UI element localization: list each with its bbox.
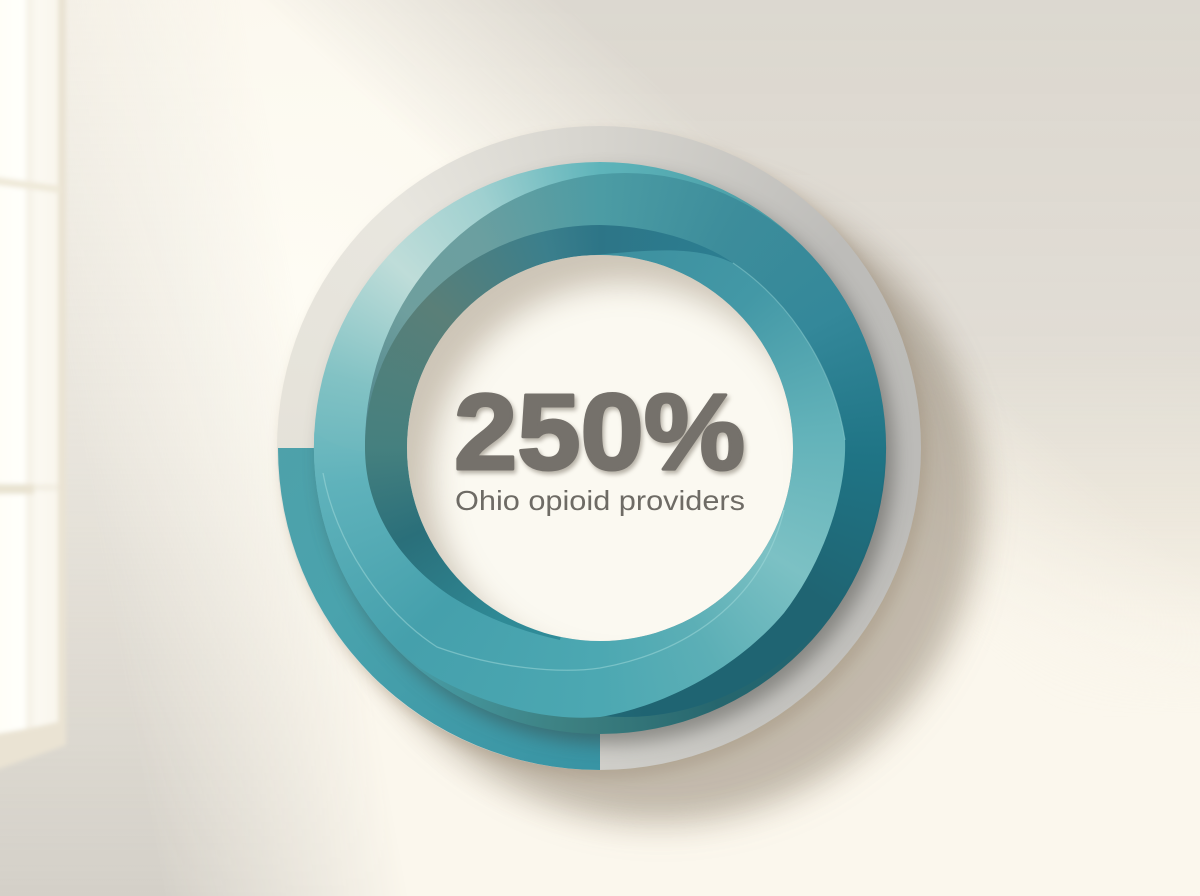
main teal spiral ring (312, 162, 904, 754)
centre hole with soft inner shadow (407, 255, 793, 641)
spiral ridge highlights (322, 262, 846, 671)
teal quarter wedge (278, 448, 600, 770)
gray outer disc (276, 126, 999, 842)
upper dark band (365, 173, 871, 717)
headline value: 250% (454, 371, 745, 492)
caption: Ohio opioid providers (455, 485, 745, 516)
dark inner crescent (365, 225, 732, 640)
inner light spiral arm (314, 252, 846, 718)
ring base face (312, 162, 886, 754)
